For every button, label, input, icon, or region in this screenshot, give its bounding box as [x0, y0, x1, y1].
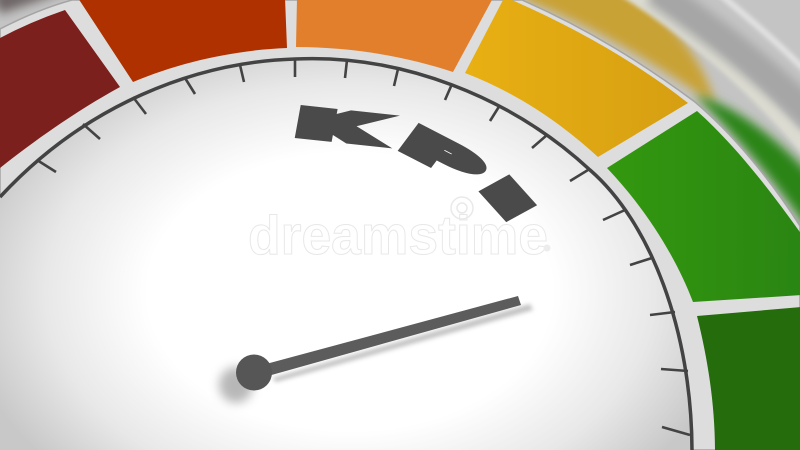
letter K: K	[299, 103, 376, 150]
watermark text: dreamstime	[248, 204, 548, 266]
segment: dark red	[0, 10, 120, 168]
segment: green	[607, 111, 800, 302]
letter P: P	[398, 121, 489, 190]
panel: dial face	[0, 59, 692, 450]
needle shadow	[219, 304, 533, 403]
segment: dark green	[697, 307, 800, 450]
segment: yellow	[465, 0, 688, 157]
segment: red orange	[78, 0, 287, 82]
title: KPI	[299, 103, 560, 242]
segment: orange	[296, 0, 493, 72]
dial arc and tick marks	[0, 59, 692, 450]
needle	[236, 296, 521, 390]
letter I: I	[456, 155, 560, 242]
